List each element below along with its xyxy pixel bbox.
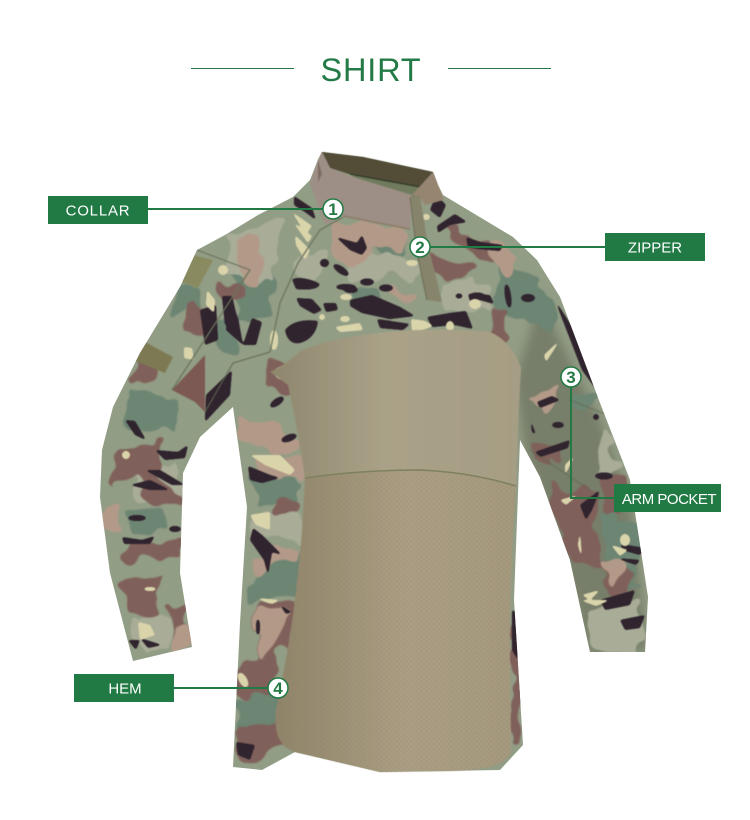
camouflage: pink patches (102, 219, 625, 660)
right sleeve base tone (518, 324, 648, 652)
callout 2: zipper (410, 233, 705, 261)
camouflage: cream spots (122, 182, 630, 689)
callout 1: collar: COLLAR (66, 202, 130, 220)
chest panel (270, 330, 521, 486)
arm patches and seams (133, 217, 620, 490)
camouflage: brown patches (112, 222, 640, 765)
title: SHIRT (321, 52, 421, 88)
callout 4: hem (74, 674, 288, 702)
callout 4: hem: HEM (108, 680, 142, 698)
callout 1: collar: 1 (328, 200, 338, 219)
callout 1: collar (48, 196, 343, 224)
callout 4: hem: 4 (273, 679, 283, 698)
callout 3: arm pocket: ARM POCKET (622, 491, 716, 508)
camouflage: dark blobs (122, 195, 645, 760)
callout 3: arm pocket (561, 367, 721, 512)
callout 3: arm pocket: 3 (566, 368, 576, 387)
camouflage: pale patches (130, 218, 640, 650)
collar (310, 152, 444, 302)
camouflage: teal patches (125, 238, 640, 740)
shirt illustration (90, 140, 660, 780)
callout 2: zipper: ZIPPER (628, 240, 682, 256)
mesh panel (275, 470, 516, 772)
callout 2: zipper: 2 (415, 238, 425, 257)
panel seam (305, 470, 516, 486)
